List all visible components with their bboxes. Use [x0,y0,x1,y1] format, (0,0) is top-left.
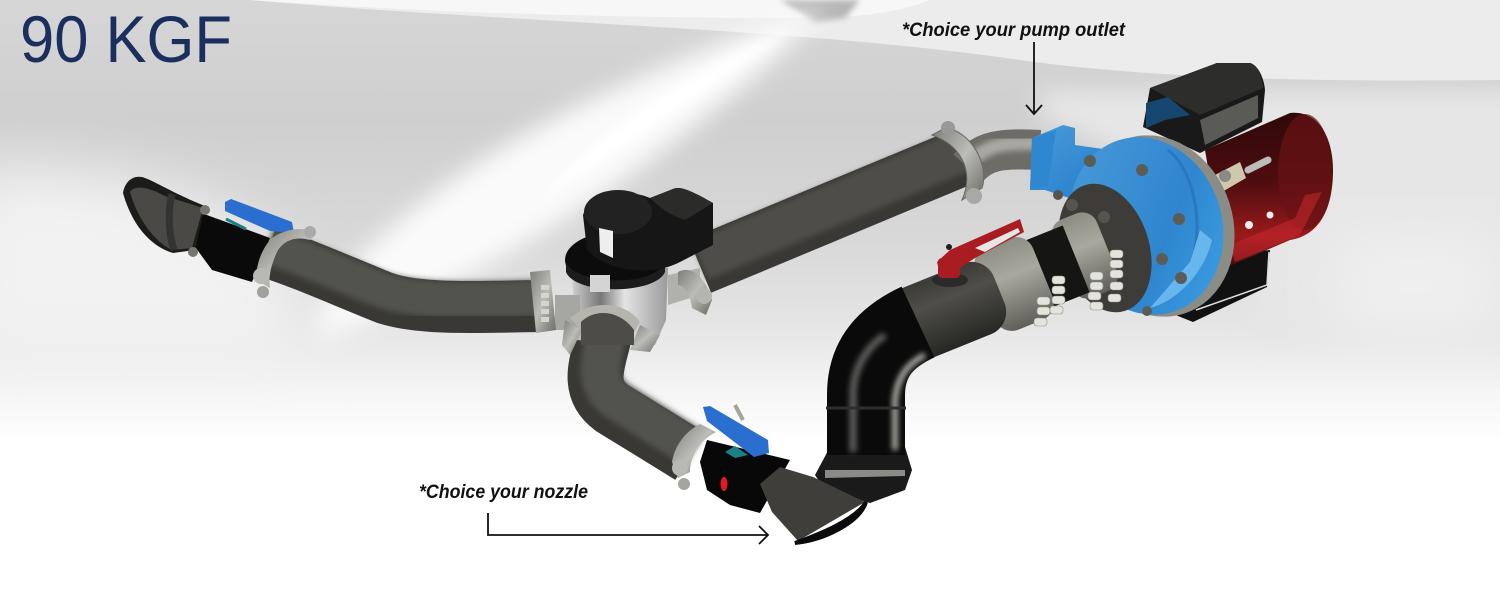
first coupling clamp [969,232,1059,336]
silver bend to pump outlet [968,143,1040,168]
motor [1205,113,1333,268]
lower nozzle [760,467,866,543]
left nozzle [123,177,210,257]
mounting bracket [1163,250,1270,322]
label: nozzle: *Choice your nozzle [419,482,588,503]
title: 90 KGF [20,2,232,76]
manifold filter body and clamps [530,268,712,355]
grey outlet pipe [872,255,1013,371]
second coupling clamp [1047,208,1122,303]
left ball valve [190,199,294,282]
coupling bolts [1034,250,1123,326]
red valve handle [932,219,1024,287]
upper left pipe [268,246,540,307]
outlet pipe and coupling [870,206,1123,376]
pump blue volute and outlet flange [1030,115,1258,337]
arrow: pump outlet [1026,42,1042,114]
terminal box [1143,63,1265,153]
lower ball valve [700,405,790,513]
upper right pipe [700,151,962,266]
lower pipe [596,335,695,456]
dark pump flange [1043,172,1167,324]
black coupling section [1016,225,1090,311]
black elbow with hex nut [815,322,925,503]
left clamp [253,226,316,298]
lower clamp [672,424,716,490]
clamp: upper right [932,121,984,204]
label: pump outlet: *Choice your pump outlet [902,20,1126,41]
arrow: nozzle [488,513,768,544]
background: water spray [318,8,825,340]
filter cap [565,188,713,292]
